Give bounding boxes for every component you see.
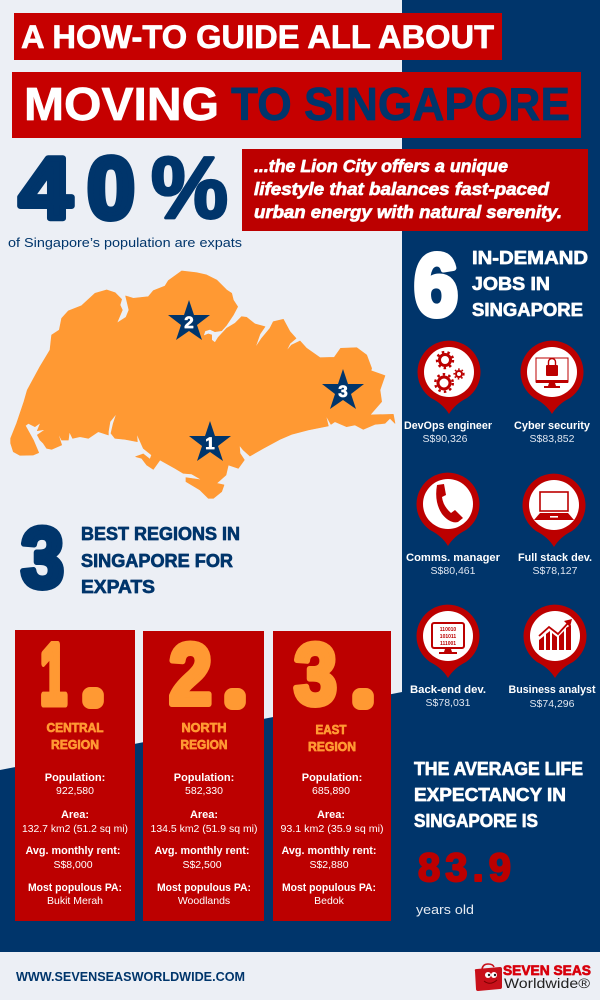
icon: laptop pin xyxy=(522,474,585,547)
job: full stack dev: S$78,127 xyxy=(533,565,578,577)
panel: north region: 582,330 xyxy=(185,785,223,797)
job: back-end dev xyxy=(410,605,486,709)
icon: binary monitor pin: 110010 xyxy=(440,627,456,633)
panel: north region: . xyxy=(229,667,241,711)
panel: central region: Avg. monthly rent: xyxy=(26,845,120,857)
job: comms manager: Comms. manager xyxy=(406,552,501,564)
heading: 3 best regions xyxy=(21,511,240,606)
panel: north region: 134.5 km2 (51.9 sq mi) xyxy=(150,823,258,835)
panel: central region: Population: xyxy=(45,772,105,784)
job: devops engineer: DevOps engineer xyxy=(404,420,493,432)
life expectancy block xyxy=(414,758,583,917)
panel: east region: 93.1 km2 (35.9 sq mi) xyxy=(280,823,384,835)
heading: 3 best regions: BEST REGIONS IN xyxy=(81,524,240,544)
panel: east region: Area: xyxy=(317,809,345,821)
job: comms manager xyxy=(406,473,501,577)
heading: 6 in-demand jobs: IN-DEMAND xyxy=(472,247,588,268)
icon: phone pin xyxy=(416,473,479,546)
panel: east region: REGION xyxy=(308,740,356,754)
icon: binary monitor pin xyxy=(416,605,479,678)
panel: east region: Most populous PA: xyxy=(282,882,376,894)
panel: central region: S$8,000 xyxy=(53,859,93,871)
panel: central region: 922,580 xyxy=(56,785,94,797)
panel: east region: . xyxy=(357,667,369,711)
map shape xyxy=(11,271,395,498)
panel: north region: Population: xyxy=(174,772,234,784)
job: cyber security: S$83,852 xyxy=(530,433,575,445)
panel: central region: Area: xyxy=(61,809,89,821)
icon: binary monitor pin: 111001 xyxy=(440,641,456,647)
panel: east region: 685,890 xyxy=(312,785,350,797)
panel: east region: Population: xyxy=(302,772,362,784)
panel: central region: 1 xyxy=(40,627,67,723)
panel: east region: Bedok xyxy=(314,895,345,907)
callout: lion city: lifestyle that balances fast-paced xyxy=(254,179,549,199)
star 1 xyxy=(189,421,231,461)
panel: north region: Avg. monthly rent: xyxy=(154,845,250,857)
job: business analyst: S$74,296 xyxy=(530,698,575,710)
life expectancy block: 83.9 xyxy=(418,846,511,890)
star 3: 3 xyxy=(338,382,348,401)
callout: lion city: ...the Lion City offers a unique xyxy=(254,156,508,176)
callout: lion city xyxy=(242,149,588,231)
job: full stack dev xyxy=(518,474,592,577)
star 1: 1 xyxy=(205,434,215,453)
star 2: 2 xyxy=(184,313,194,332)
map of Singapore with region stars xyxy=(11,271,395,498)
panel: north region: 2 xyxy=(169,627,212,723)
stat: 40 percent expats xyxy=(8,140,243,250)
panel: east region: S$2,880 xyxy=(309,859,349,871)
heading: 3 best regions: 3 xyxy=(21,511,64,606)
panel: north region: NORTH xyxy=(182,721,226,735)
job: business analyst xyxy=(508,605,596,710)
job: comms manager: S$80,461 xyxy=(431,565,476,577)
job: back-end dev: S$78,031 xyxy=(426,697,471,709)
logo: Seven Seas Worldwide: SEVEN SEAS xyxy=(503,962,591,978)
icon: growth chart pin xyxy=(523,605,586,678)
panel: central region xyxy=(15,627,135,921)
panel: north region: Woodlands xyxy=(178,895,230,907)
icon: red suitcase xyxy=(475,964,502,991)
panel: central region: REGION xyxy=(51,738,99,752)
job: devops engineer xyxy=(404,341,493,445)
icon: monitor lock pin xyxy=(520,341,583,414)
job: cyber security: Cyber security xyxy=(514,420,591,432)
star 3 xyxy=(322,369,364,409)
title line 2: TO SINGAPORE xyxy=(231,78,570,130)
icon: binary monitor pin: 101011 xyxy=(440,634,456,640)
job: devops engineer: S$90,326 xyxy=(423,433,468,445)
panel: north region: S$2,500 xyxy=(182,859,222,871)
logo: Seven Seas Worldwide: Worldwide® xyxy=(504,975,591,991)
logo: Seven Seas Worldwide xyxy=(475,962,591,991)
panel: east region: 3 xyxy=(294,627,337,723)
life expectancy block: SINGAPORE IS xyxy=(414,810,538,831)
icon: gears pin xyxy=(417,341,480,414)
panel: north region: Most populous PA: xyxy=(157,882,251,894)
heading: 3 best regions: EXPATS xyxy=(81,577,155,597)
panel: central region: . xyxy=(87,666,99,710)
heading: 3 best regions: SINGAPORE FOR xyxy=(81,551,233,571)
stat: 40 percent expats: 0 xyxy=(87,140,135,237)
panel: east region xyxy=(273,627,391,921)
title line 2 xyxy=(12,72,581,138)
panel: central region: Most populous PA: xyxy=(28,882,122,894)
title line 2: MOVING xyxy=(24,78,219,130)
stat: 40 percent expats: % xyxy=(151,140,228,237)
panel: central region: 132.7 km2 (51.2 sq mi) xyxy=(22,823,128,835)
title line 1: A HOW-TO GUIDE ALL ABOUT xyxy=(21,19,494,55)
life expectancy block: THE AVERAGE LIFE xyxy=(414,758,583,779)
footer url: WWW.SEVENSEASWORLDWIDE.COM xyxy=(16,970,245,984)
panel: central region: CENTRAL xyxy=(46,721,104,735)
life expectancy block: years old xyxy=(416,902,474,917)
heading: 6 in-demand jobs: JOBS IN xyxy=(472,273,550,294)
panel: north region: REGION xyxy=(180,738,228,752)
life expectancy block: EXPECTANCY IN xyxy=(414,784,566,805)
stat: 40 percent expats: 4 xyxy=(19,140,72,237)
panel: east region: Avg. monthly rent: xyxy=(282,845,376,857)
heading: 6 in-demand jobs: SINGAPORE xyxy=(472,299,583,320)
heading: 6 in-demand jobs: 6 xyxy=(414,237,458,334)
heading: 6 in-demand jobs xyxy=(414,237,588,334)
job: cyber security xyxy=(514,341,591,445)
job: back-end dev: Back-end dev. xyxy=(410,684,486,696)
job: business analyst: Business analyst xyxy=(508,684,596,696)
panel: east region: EAST xyxy=(316,723,347,737)
stat: 40 percent expats: of Singapore’s population are expats xyxy=(8,235,243,250)
panel: north region: Area: xyxy=(190,809,218,821)
panel: central region: Bukit Merah xyxy=(47,895,103,907)
panel: north region xyxy=(143,627,264,921)
job: full stack dev: Full stack dev. xyxy=(518,552,592,564)
callout: lion city: urban energy with natural serenity. xyxy=(254,202,562,222)
star 2 xyxy=(168,300,210,340)
